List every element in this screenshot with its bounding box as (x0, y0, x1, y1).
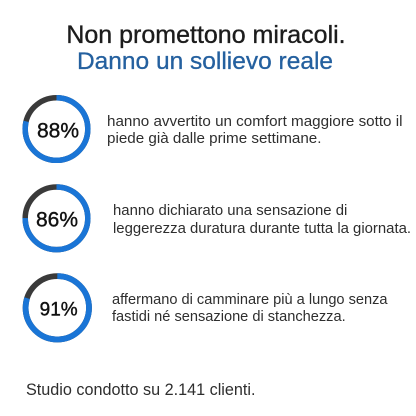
stat text: 91%: affermano di camminare più a lungo senza (112, 292, 388, 308)
stat ring: 88% (22, 95, 91, 163)
stat ring: 88%: 88% (37, 120, 79, 142)
stat ring: 91% (22, 273, 92, 342)
footnote: Studio condotto su 2.141 clienti. (26, 381, 255, 399)
stat text: 86%: leggerezza duratura durante tutta la giornata. (113, 220, 411, 236)
subtitle: Danno un sollievo reale (77, 48, 333, 75)
stat text: 91% (112, 292, 388, 325)
stat ring: 91%: 91% (40, 300, 78, 320)
title: Non promettono miracoli. (66, 21, 346, 49)
stat text: 88% (107, 112, 402, 147)
stat ring: 86%: 86% (36, 208, 78, 232)
stat text: 91%: fastidi né sensazione di stanchezza. (112, 309, 346, 325)
stat text: 88%: piede già dalle prime settimane. (107, 130, 321, 147)
stat text: 86%: hanno dichiarato una sensazione di (113, 203, 347, 219)
stat text: 86% (113, 203, 411, 236)
stat text: 88%: hanno avvertito un comfort maggiore sotto il (107, 112, 402, 130)
stat ring: 86% (22, 184, 91, 252)
